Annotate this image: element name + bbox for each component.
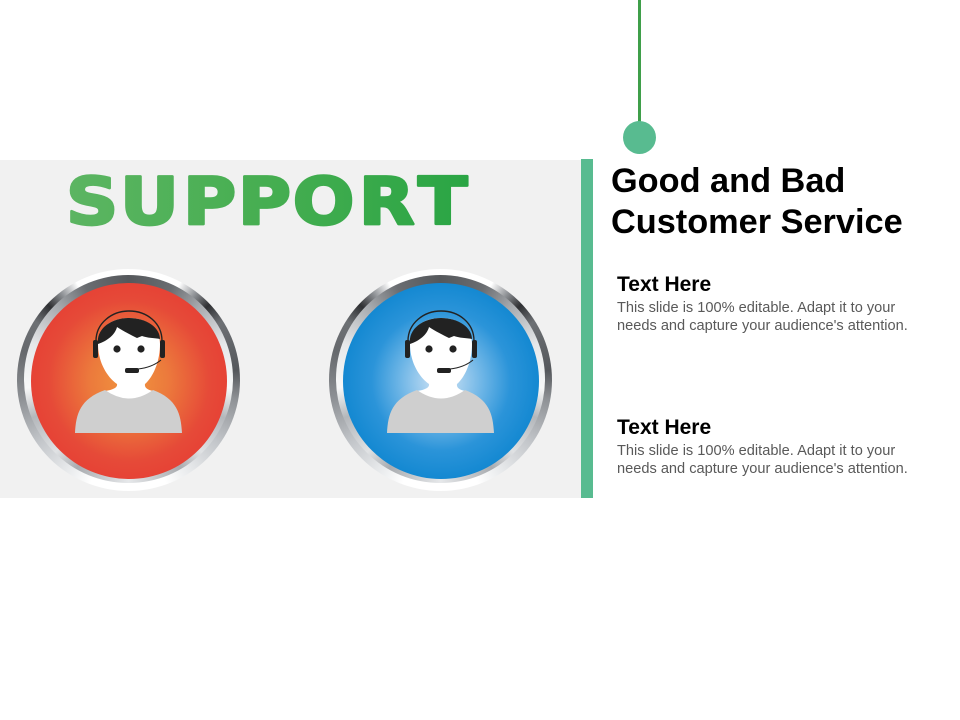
- icon: agent neck and head: [410, 318, 472, 399]
- body text: first block: [617, 300, 908, 334]
- body text: first block: needs and capture your audience's attention.: [617, 318, 908, 334]
- body text: first block: This slide is 100% editable. Adapt it to your: [617, 300, 895, 316]
- icon: eyes: [425, 345, 456, 353]
- body text: second block: needs and capture your audience's attention.: [617, 461, 908, 477]
- body text: second block: [617, 443, 908, 477]
- SUPPORT word art: SUPPORT: [66, 165, 468, 240]
- title: Good and Bad: [611, 162, 845, 200]
- icon: agent body: [386, 390, 494, 433]
- badge: red support agent: [17, 269, 240, 491]
- title: [611, 162, 903, 241]
- icon: agent hair: [409, 318, 472, 344]
- grey background panel: [0, 160, 581, 498]
- green vertical accent bar: [581, 159, 593, 498]
- heading: first text block: Text Here: [617, 273, 711, 296]
- icon: headset: [404, 311, 476, 373]
- badge: blue support agent: [329, 269, 552, 491]
- icon: agent neck and head: [98, 318, 160, 399]
- icon: agent hair: [98, 318, 160, 344]
- circle node: [623, 121, 656, 154]
- body text: second block: This slide is 100% editable. Adapt it to your: [617, 443, 895, 459]
- hanging line: [638, 0, 641, 124]
- icon: headset: [93, 311, 165, 373]
- icon: eyes: [113, 345, 145, 353]
- heading: second text block: Text Here: [617, 416, 711, 439]
- title: Customer Service: [611, 203, 903, 241]
- icon: agent body: [75, 390, 182, 433]
